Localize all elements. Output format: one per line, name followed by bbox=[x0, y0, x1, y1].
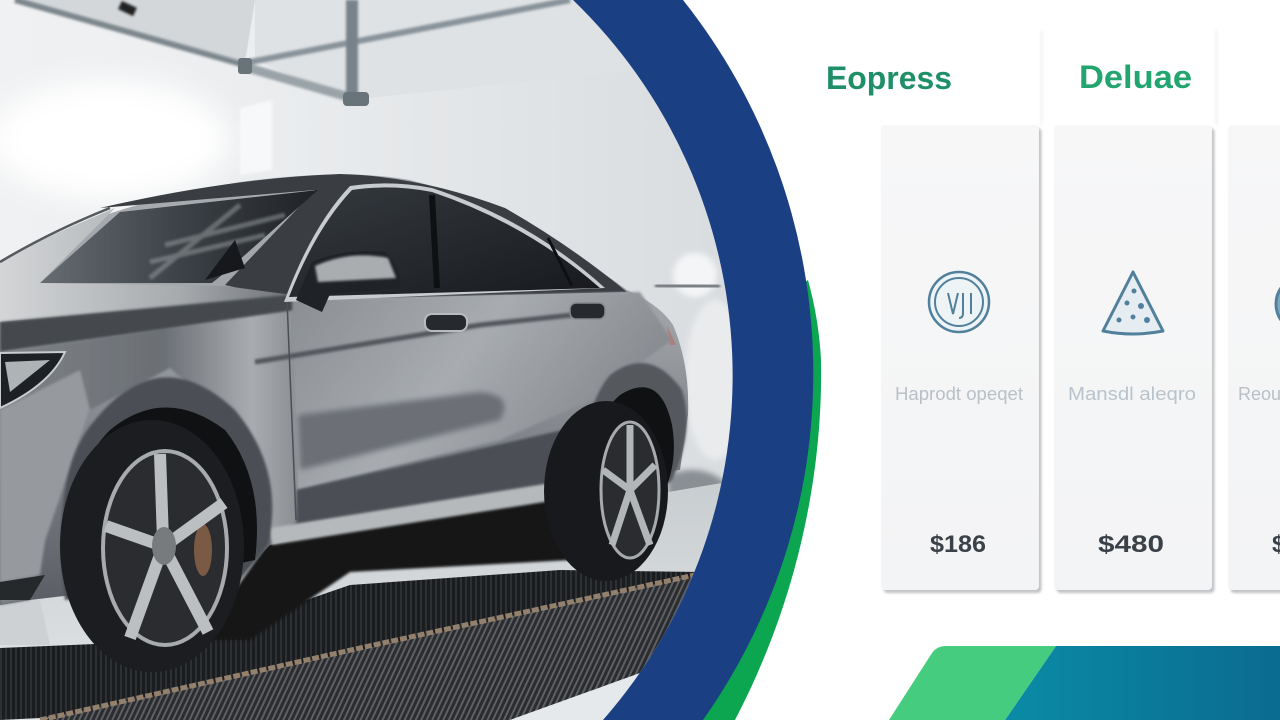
card background bbox=[881, 125, 1039, 590]
rear wheel bbox=[544, 401, 668, 581]
rear wheel arch inner bbox=[582, 387, 674, 500]
rear spokes bbox=[603, 425, 655, 545]
ceiling pipes bbox=[15, 0, 570, 100]
white floor corner bbox=[510, 673, 640, 720]
bright wall glow bbox=[0, 80, 230, 200]
card background bbox=[1054, 125, 1212, 590]
feature label: Reou bbox=[1238, 384, 1280, 404]
mirror highlight bbox=[315, 255, 396, 282]
front rim bbox=[103, 451, 227, 645]
front bumper lower bbox=[0, 575, 45, 600]
header column divider left bbox=[1040, 30, 1043, 125]
door panel bbox=[292, 292, 672, 490]
front hub bbox=[152, 527, 176, 565]
dark shoulder crease bbox=[0, 294, 300, 352]
windshield wiper shadow bbox=[205, 240, 245, 280]
front wheel bbox=[60, 420, 244, 672]
rear rim bbox=[601, 422, 659, 558]
rusty floor rail bbox=[40, 575, 695, 720]
bottom banner bbox=[889, 646, 1280, 720]
heading: Express: Eopress bbox=[826, 60, 952, 96]
icon: water drops triangle bbox=[1103, 272, 1163, 334]
window pillar bbox=[432, 195, 437, 288]
rear door handle bbox=[570, 303, 605, 319]
dark floor grating bbox=[0, 570, 700, 720]
icon: cropped circle bbox=[1276, 276, 1280, 332]
side window glass bbox=[289, 187, 600, 297]
front door handle bbox=[425, 314, 467, 331]
car body bbox=[0, 174, 688, 605]
lower door band bbox=[296, 429, 561, 524]
package card: Deluxe bbox=[1054, 59, 1212, 590]
banner green section bbox=[889, 646, 1056, 720]
car bbox=[0, 174, 688, 672]
windshield reflection bars bbox=[150, 205, 285, 278]
A-pillar edge bbox=[0, 208, 110, 262]
rear quarter window divider bbox=[548, 238, 572, 286]
front tire bbox=[60, 420, 244, 672]
front spokes bbox=[106, 454, 224, 638]
photo: car in wash bay bbox=[0, 0, 732, 720]
front wheel arch bbox=[61, 377, 272, 600]
package card: third, cropped bbox=[1228, 125, 1280, 590]
blue arc band bbox=[573, 0, 813, 720]
icon: water circle bbox=[929, 272, 989, 332]
rear light bbox=[667, 325, 676, 345]
upper wall panel bbox=[255, 0, 344, 89]
hood bbox=[0, 208, 300, 322]
front fender bbox=[0, 310, 296, 605]
price: $186 bbox=[930, 531, 986, 558]
side window frame bbox=[284, 183, 605, 302]
header column divider right bbox=[1215, 30, 1218, 125]
water drip on wall bbox=[240, 100, 272, 175]
windshield bbox=[40, 190, 318, 283]
ceiling panel bbox=[15, 0, 255, 62]
price: $480 bbox=[1098, 531, 1164, 558]
steel floor grille bbox=[40, 575, 695, 720]
wing mirror bbox=[296, 251, 400, 312]
headlight lens bbox=[5, 360, 50, 392]
rear tire bbox=[544, 401, 668, 581]
door seam bbox=[287, 300, 296, 520]
front wheel arch inner bbox=[68, 408, 257, 600]
left wet floor patch bbox=[0, 600, 50, 645]
heading: Deluxe: Deluae bbox=[1079, 59, 1192, 95]
body crease line bbox=[255, 312, 600, 362]
feature label: Mansdl aleqro bbox=[1068, 384, 1196, 404]
spray mist bbox=[653, 252, 732, 504]
front bumper bbox=[0, 370, 90, 582]
wash bay wall bbox=[0, 0, 729, 492]
roof dark bbox=[100, 174, 627, 300]
headlight bbox=[0, 352, 65, 408]
sill highlight bbox=[270, 482, 544, 546]
door reflection bbox=[298, 392, 504, 470]
green accent arc bbox=[695, 280, 821, 720]
feature label: Haprodt opeqet bbox=[895, 384, 1023, 404]
shadow under car bbox=[214, 500, 568, 641]
package card: Express bbox=[826, 60, 1039, 590]
wet floor bbox=[0, 480, 740, 720]
rear wheel arch bbox=[582, 363, 687, 500]
banner teal section bbox=[1005, 646, 1280, 720]
brake caliper bbox=[194, 524, 212, 576]
card background bbox=[1228, 125, 1280, 590]
pipe joints bbox=[238, 58, 369, 106]
